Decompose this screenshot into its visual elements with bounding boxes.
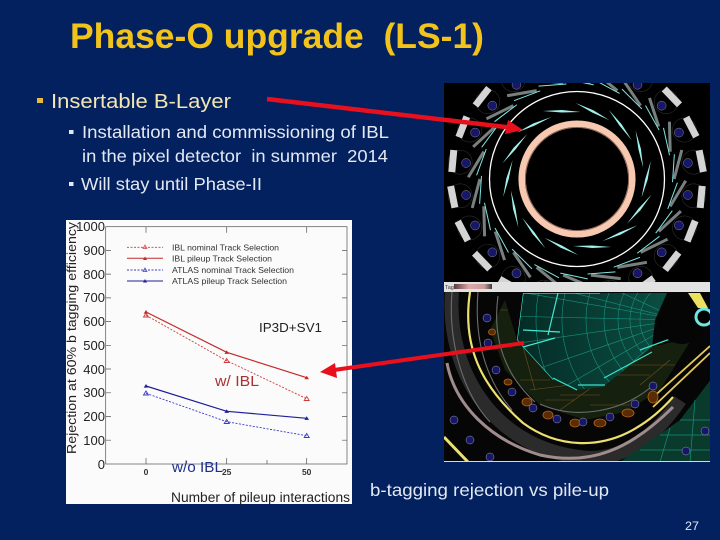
IBL staves (501, 102, 653, 256)
yellow corner arc (444, 437, 468, 462)
orange electronics loops (488, 329, 658, 427)
bullet: Insertable B-Layer: Insertable B-Layer (51, 90, 231, 113)
chart legend: IBL pileup Track Selection (172, 254, 272, 264)
sub-bullet: installation: in the pixel detector in summer 2014 (82, 146, 388, 166)
x axis tick labels: 25 (222, 467, 232, 477)
chart panel (66, 220, 352, 504)
x axis title: Number of pileup interactions (171, 490, 350, 505)
chart legend: ATLAS nominal Track Selection (172, 265, 294, 275)
x axis tick labels: 0 (144, 467, 149, 477)
beam pipe opening (668, 327, 700, 344)
lower right mesh (620, 378, 712, 462)
chart legend: IBL nominal Track Selection (172, 242, 279, 252)
page number: 27 (685, 519, 699, 533)
image bottom edge (444, 461, 710, 462)
peach beam pipe ring (522, 124, 632, 234)
y axis tick labels (76, 219, 105, 472)
mauve barrel arc (447, 363, 673, 458)
y axis tick labels: 100 (83, 433, 105, 448)
y axis tick labels: 500 (83, 338, 105, 353)
algorithm label: IP3D+SV1 (259, 320, 322, 335)
y axis tick labels: 1000 (76, 219, 105, 234)
olive stave region (490, 300, 690, 420)
x axis tick labels: 50 (302, 467, 312, 477)
detector image: cross section (444, 83, 710, 282)
detector image: 3D view (444, 292, 710, 462)
chart legend: ATLAS pileup Track Selection (172, 276, 287, 286)
plot axes (106, 227, 347, 464)
text block: bullets (37, 90, 389, 194)
chart legend (127, 242, 294, 286)
image toolbar strip (444, 282, 710, 292)
sub-bullet: Phase-II: Will stay until Phase-II (81, 174, 262, 194)
y axis tick labels: 800 (83, 267, 105, 282)
y axis title: Rejection at 60% b tagging efficiency (64, 221, 79, 454)
series: IBL pileup (144, 310, 309, 379)
inner beam ring (696, 309, 712, 325)
yellow barrel arc (468, 292, 673, 443)
y axis tick labels: 200 (83, 409, 105, 424)
teal IBL mesh (517, 293, 667, 390)
y axis tick labels: 0 (98, 457, 105, 472)
outer grey staves (451, 292, 650, 422)
navy cooling pipes (450, 314, 709, 461)
annotation: with IBL: w/ IBL (214, 373, 259, 390)
y axis tick labels: 600 (83, 314, 105, 329)
yellow and orange diagonal (650, 346, 710, 407)
sub-bullet: installation (69, 122, 389, 166)
series: ATLAS pileup (144, 384, 309, 420)
y axis tick labels: 900 (83, 243, 105, 258)
x axis tick labels (144, 467, 312, 477)
bright stave edges (552, 339, 669, 390)
caption: b-tagging rejection vs pile-up (370, 480, 609, 500)
series: IBL nominal (144, 313, 309, 400)
annotation: without IBL: w/o IBL (171, 459, 223, 476)
yellow wedge (688, 293, 708, 308)
dark grey barrel band (452, 292, 680, 458)
y axis tick labels: 400 (83, 362, 105, 377)
sub-bullet: installation: Installation and commissioning of IBL (82, 122, 389, 142)
title: Phase-O upgrade (LS-1) (70, 17, 484, 56)
y axis tick labels: 700 (83, 290, 105, 305)
image toolbar strip: Tag (445, 285, 454, 291)
chart: rejection vs pileup (64, 219, 352, 505)
arrow: to IBL curve (320, 343, 524, 378)
y axis tick labels: 300 (83, 385, 105, 400)
outer pixel layer modules (447, 83, 707, 282)
white support ring (490, 92, 664, 266)
series: ATLAS nominal (144, 391, 309, 438)
arrow: to IBL layer (267, 99, 523, 134)
